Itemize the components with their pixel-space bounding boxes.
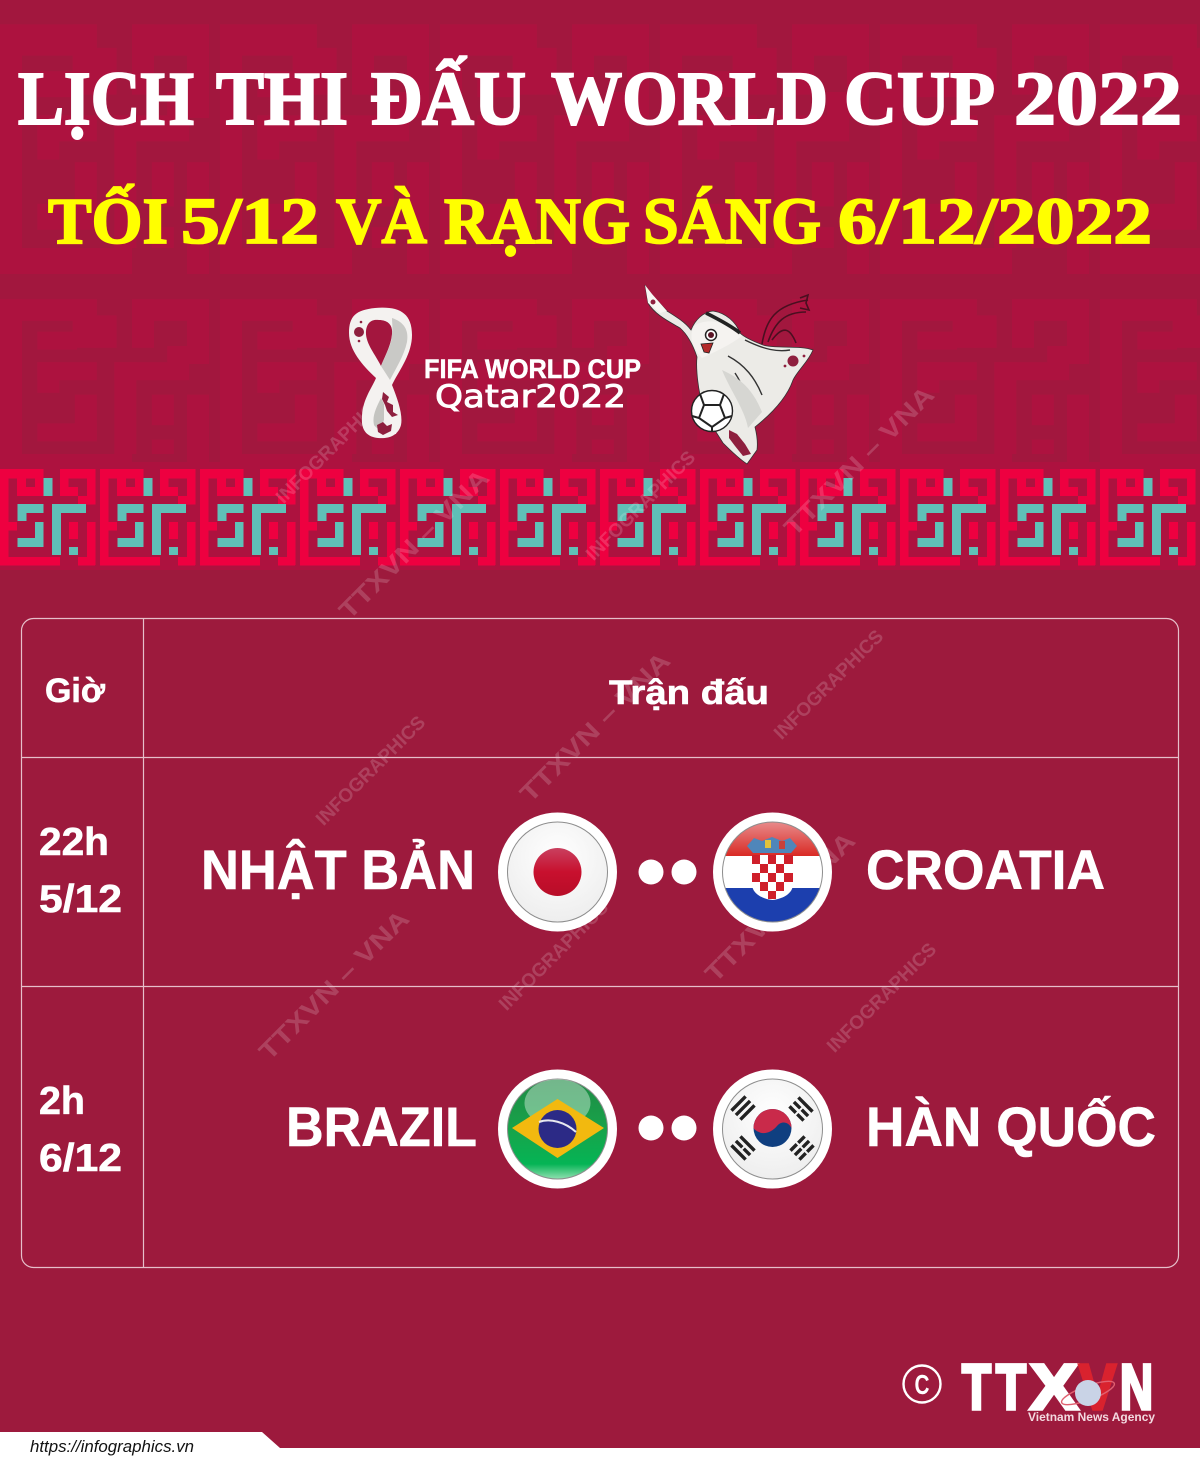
vs dots: [638, 1116, 696, 1140]
watermarks: TTXVN – VNA: [334, 464, 495, 625]
header background pattern: [0, 0, 1200, 466]
watermarks: TTXVN – VNA: [515, 647, 676, 808]
table header: match: Trận đấu: [609, 674, 769, 712]
title: LỊCH: [18, 57, 194, 141]
row 1 team: Croatia: CROATIA: [866, 838, 1105, 901]
row 1 time: 22h: [39, 821, 109, 864]
watermarks: INFOGRAPHICS: [495, 897, 613, 1015]
title: 2022: [1014, 57, 1182, 141]
title: WORLD: [551, 57, 828, 141]
footer strip: [0, 1432, 1200, 1458]
row 2 time: 6/12: [39, 1137, 122, 1180]
logo text: FIFA World Cup: Qatar2022: [435, 379, 626, 415]
row 2 time: 2h: [39, 1080, 85, 1123]
logo: TTXVN: T: [962, 1351, 991, 1423]
logo: TTXVN: X: [1030, 1351, 1078, 1423]
watermarks: [254, 381, 941, 1066]
logo text: FIFA World Cup: FIFA WORLD CUP: [424, 354, 641, 384]
row 1 time: 5/12: [39, 878, 122, 921]
subtitle: 6/12/2022: [838, 185, 1152, 258]
copyright symbol: C: [914, 1369, 930, 1400]
watermarks: TTXVN – VNA: [779, 381, 940, 542]
watermarks: INFOGRAPHICS: [823, 939, 941, 1057]
table frame: [22, 618, 1178, 1268]
subtitle: SÁNG: [643, 185, 821, 258]
row 2 team: Brazil: BRAZIL: [286, 1095, 477, 1158]
subtitle: RẠNG: [444, 185, 630, 258]
mascot football: [692, 390, 732, 432]
watermarks: TTXVN – VNA: [254, 905, 415, 1066]
watermarks: INFOGRAPHICS: [272, 390, 390, 508]
subtitle: [48, 184, 1152, 258]
flag: Japan: [498, 812, 617, 932]
subtitle: TỐI: [48, 184, 168, 258]
watermarks: INFOGRAPHICS: [582, 447, 700, 565]
row 2 time: [39, 1080, 122, 1180]
footer url: https://infographics.vn: [30, 1437, 194, 1456]
row 1 time: [39, 821, 122, 921]
logo: TTXVN: Vietnam News Agency: [1028, 1412, 1156, 1424]
logo: TTXVN: [962, 1351, 1156, 1424]
subtitle: 5/12: [181, 185, 319, 258]
flag: Croatia: [713, 812, 832, 932]
table header: time: Giờ: [45, 672, 106, 710]
row 2 team: South Korea: HÀN QUỐC: [866, 1095, 1156, 1158]
vs dots: [638, 860, 696, 884]
title: ĐẤU: [370, 56, 526, 141]
icon: mascot La'eeb: [645, 285, 813, 464]
mascot face: [691, 321, 742, 358]
title: CUP: [844, 57, 995, 141]
title: THI: [216, 57, 348, 141]
title: [18, 56, 1182, 141]
copyright symbol: [904, 1366, 940, 1402]
watermarks: TTXVN – VNA: [700, 827, 861, 988]
row 1 team: Japan: NHẬT BẢN: [201, 838, 475, 901]
flag: Brazil: [498, 1070, 617, 1188]
flag: South Korea: [713, 1070, 832, 1188]
mascot body: [645, 285, 813, 464]
decorative motif band: [0, 462, 1200, 570]
icon: world cup emblem: [349, 308, 412, 438]
watermarks: INFOGRAPHICS: [312, 712, 430, 830]
logo text: FIFA World Cup: [424, 354, 641, 415]
logo: TTXVN: V: [1079, 1351, 1116, 1423]
logo: TTXVN: T: [996, 1351, 1026, 1423]
subtitle: VÀ: [336, 185, 427, 258]
logo: TTXVN: N: [1120, 1351, 1153, 1423]
mascot emblem: [650, 300, 805, 456]
mascot headdress tassels: [762, 295, 809, 344]
watermarks: INFOGRAPHICS: [770, 626, 888, 744]
